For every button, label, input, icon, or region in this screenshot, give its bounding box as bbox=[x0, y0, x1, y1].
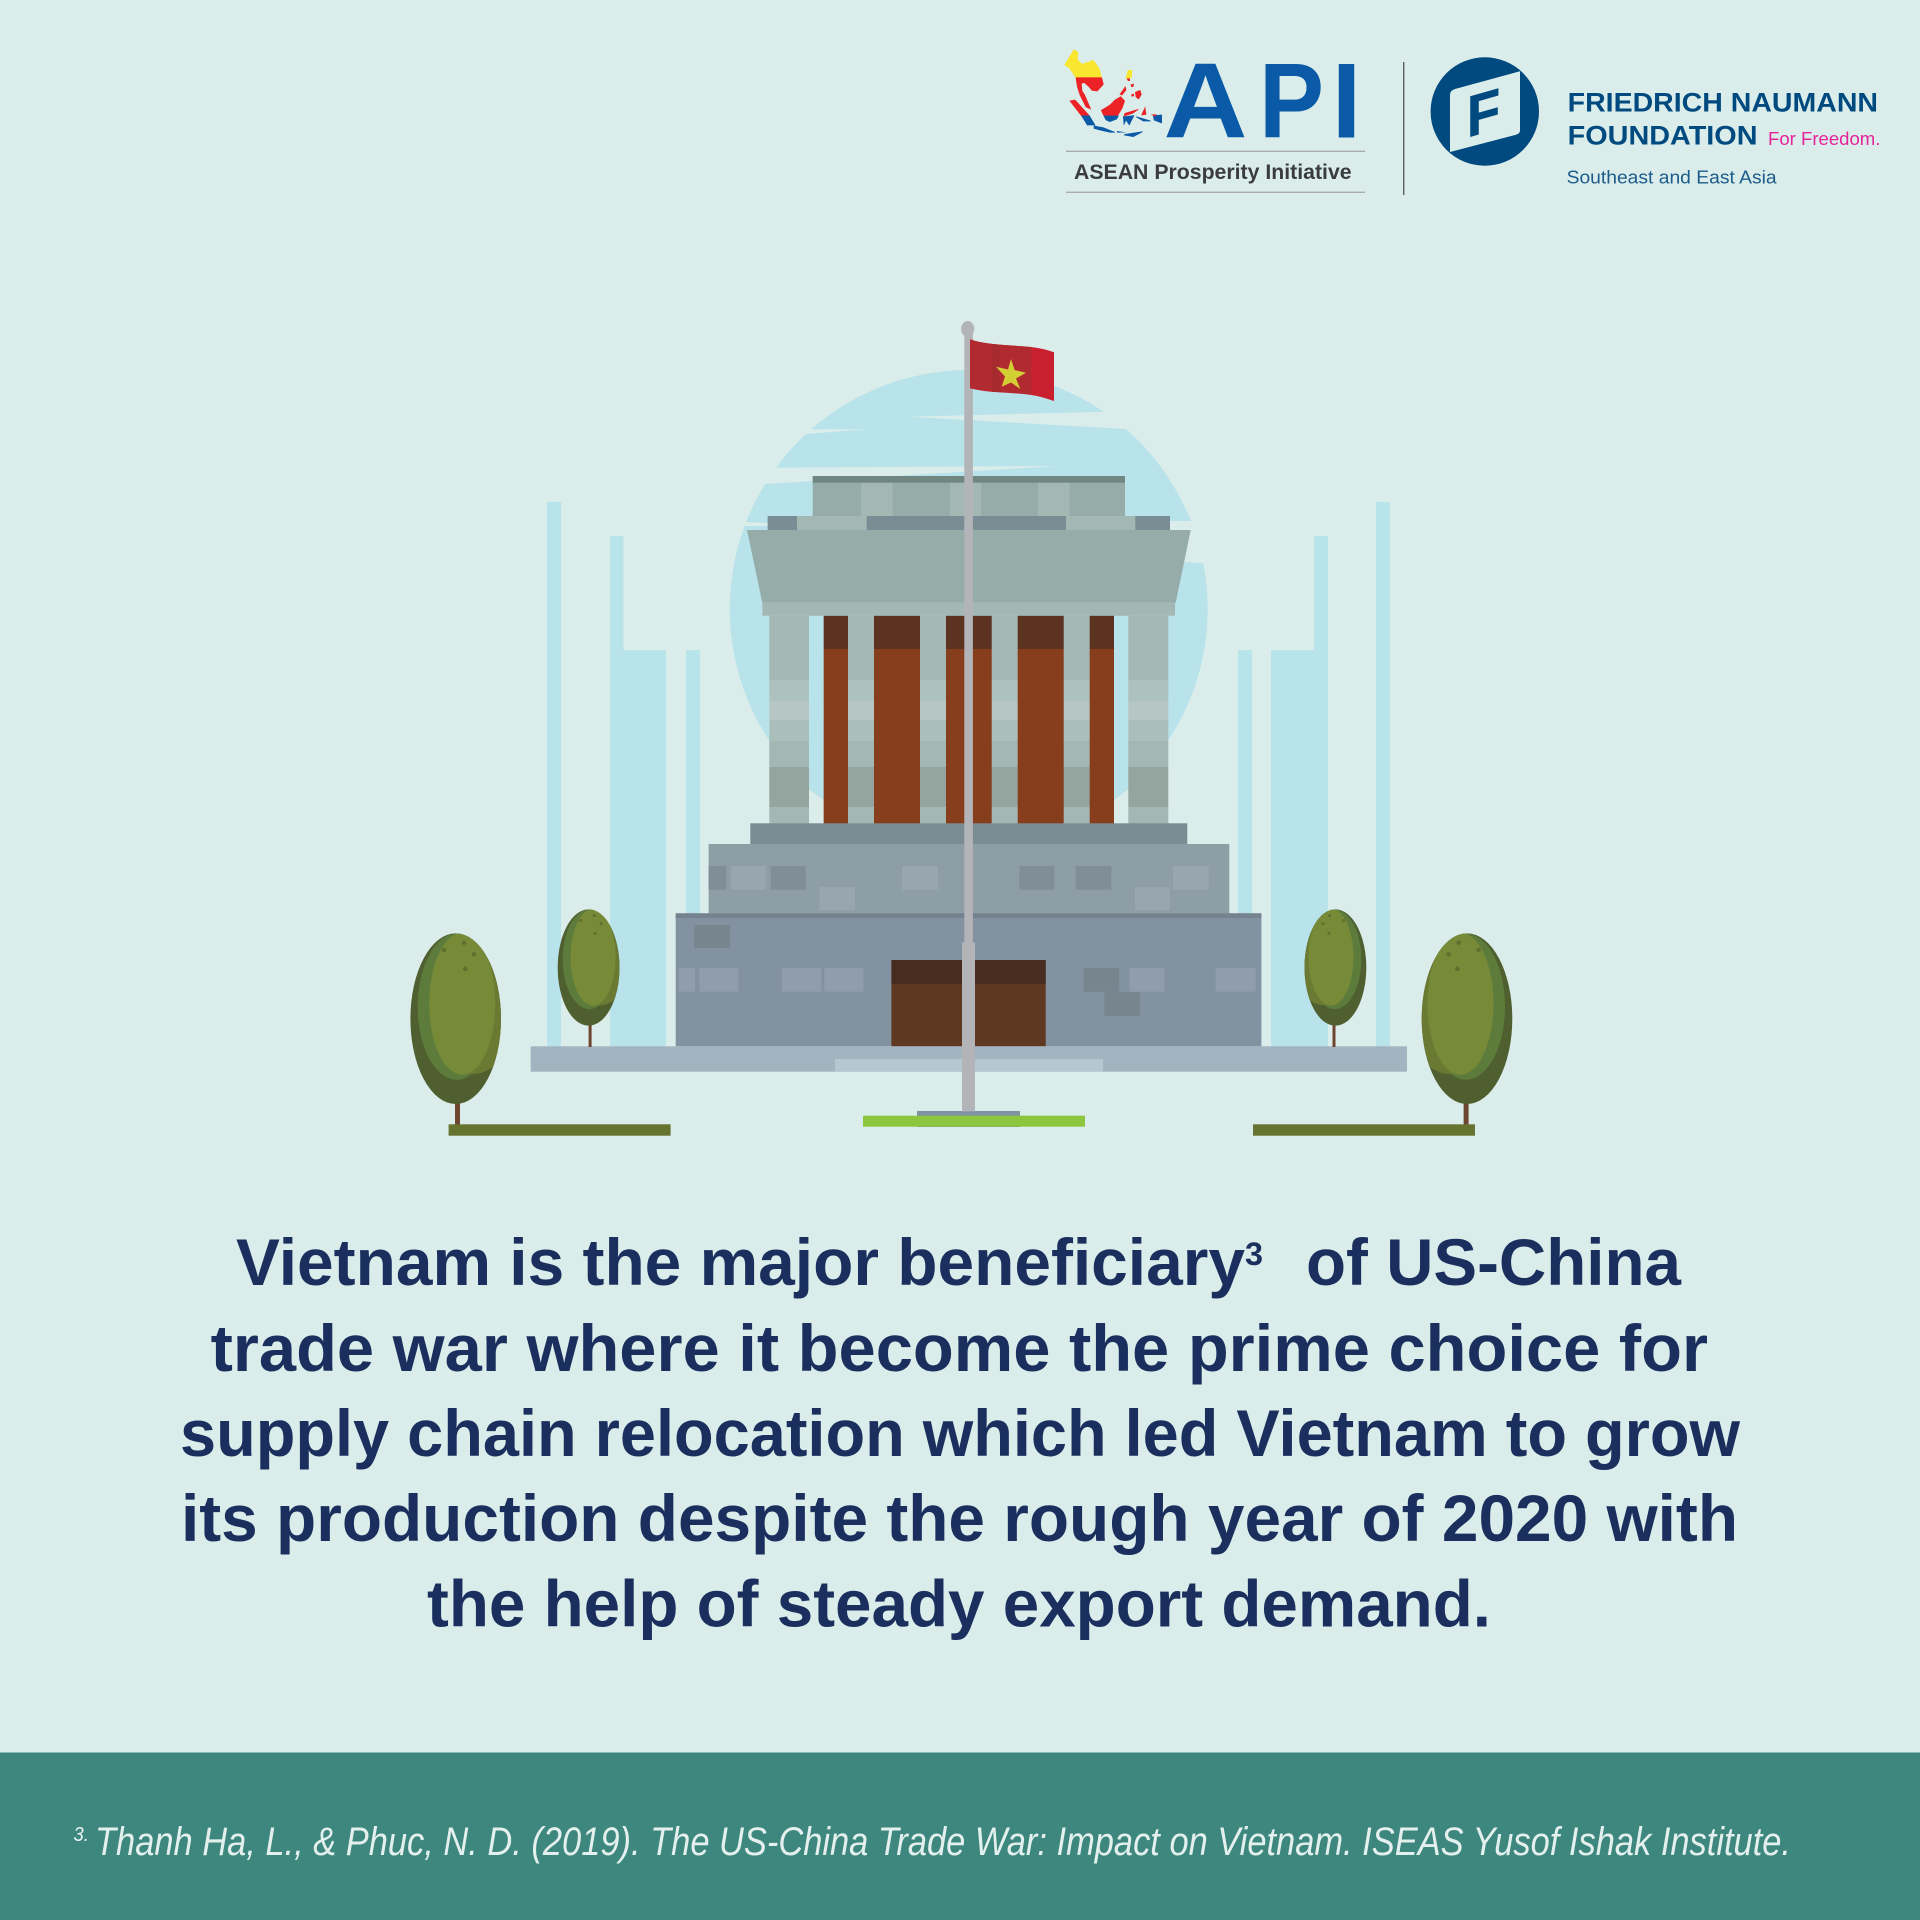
API wordmark: I bbox=[1332, 41, 1361, 161]
line 4: its production despite the rough year of 2020 with bbox=[181, 1481, 1738, 1555]
footnote marker: 3. bbox=[74, 1824, 89, 1846]
brown openings bbox=[824, 616, 1114, 824]
tree: inner right bbox=[1301, 907, 1366, 1047]
logo: Friedrich Naumann Foundation bbox=[1431, 57, 1880, 187]
ground bars bbox=[449, 1124, 1475, 1136]
icon: yellow star bbox=[996, 359, 1026, 389]
logo: Friedrich Naumann Foundation: FOUNDATION bbox=[1568, 120, 1758, 150]
background sky circle bbox=[725, 370, 1225, 848]
main statement text bbox=[180, 1225, 1741, 1641]
line 1: 3 bbox=[1245, 1236, 1263, 1272]
lower terrace bbox=[676, 913, 1261, 1046]
tree: inner left bbox=[558, 907, 623, 1047]
tree: far left bbox=[410, 930, 507, 1125]
top step bbox=[750, 823, 1187, 844]
ledge bbox=[768, 516, 1170, 530]
tree: far right bbox=[1416, 930, 1512, 1125]
line 1 bbox=[236, 1225, 1682, 1299]
roof bbox=[747, 530, 1191, 616]
line 1: of US-China bbox=[1306, 1225, 1682, 1299]
line 3: supply chain relocation which led Vietnam to grow bbox=[180, 1396, 1741, 1470]
region label: Southeast and East Asia bbox=[1567, 167, 1778, 187]
illustration: Ho Chi Minh mausoleum bbox=[410, 321, 1512, 1136]
flagpole bbox=[863, 321, 1085, 1127]
ASEAN Prosperity Initiative label: ASEAN Prosperity Initiative bbox=[1074, 160, 1352, 184]
tagline: For Freedom. bbox=[1768, 128, 1880, 149]
platform bbox=[531, 1046, 1407, 1072]
icon: FNF circle: F bbox=[1467, 75, 1500, 150]
line 2: trade war where it become the prime choice for bbox=[211, 1311, 1708, 1385]
line 1: Vietnam is the major beneficiary bbox=[236, 1225, 1245, 1299]
background towers bbox=[547, 502, 1390, 1047]
API wordmark bbox=[1164, 41, 1361, 161]
upper terrace bbox=[709, 844, 1229, 914]
API wordmark: P bbox=[1259, 41, 1324, 161]
icon: FNF circle bbox=[1431, 57, 1539, 166]
logo: ASEAN Prosperity Initiative bbox=[1065, 41, 1365, 193]
footer band bbox=[0, 1752, 1920, 1920]
upper block bbox=[813, 476, 1125, 516]
entrance door bbox=[891, 960, 1046, 1046]
API wordmark: A bbox=[1164, 41, 1248, 161]
columns bbox=[769, 616, 1168, 824]
line 5: the help of steady export demand. bbox=[427, 1567, 1491, 1641]
flag of Vietnam bbox=[970, 339, 1054, 401]
icon: ASEAN map bbox=[1065, 50, 1162, 137]
foundation name: FRIEDRICH NAUMANN bbox=[1568, 88, 1878, 118]
